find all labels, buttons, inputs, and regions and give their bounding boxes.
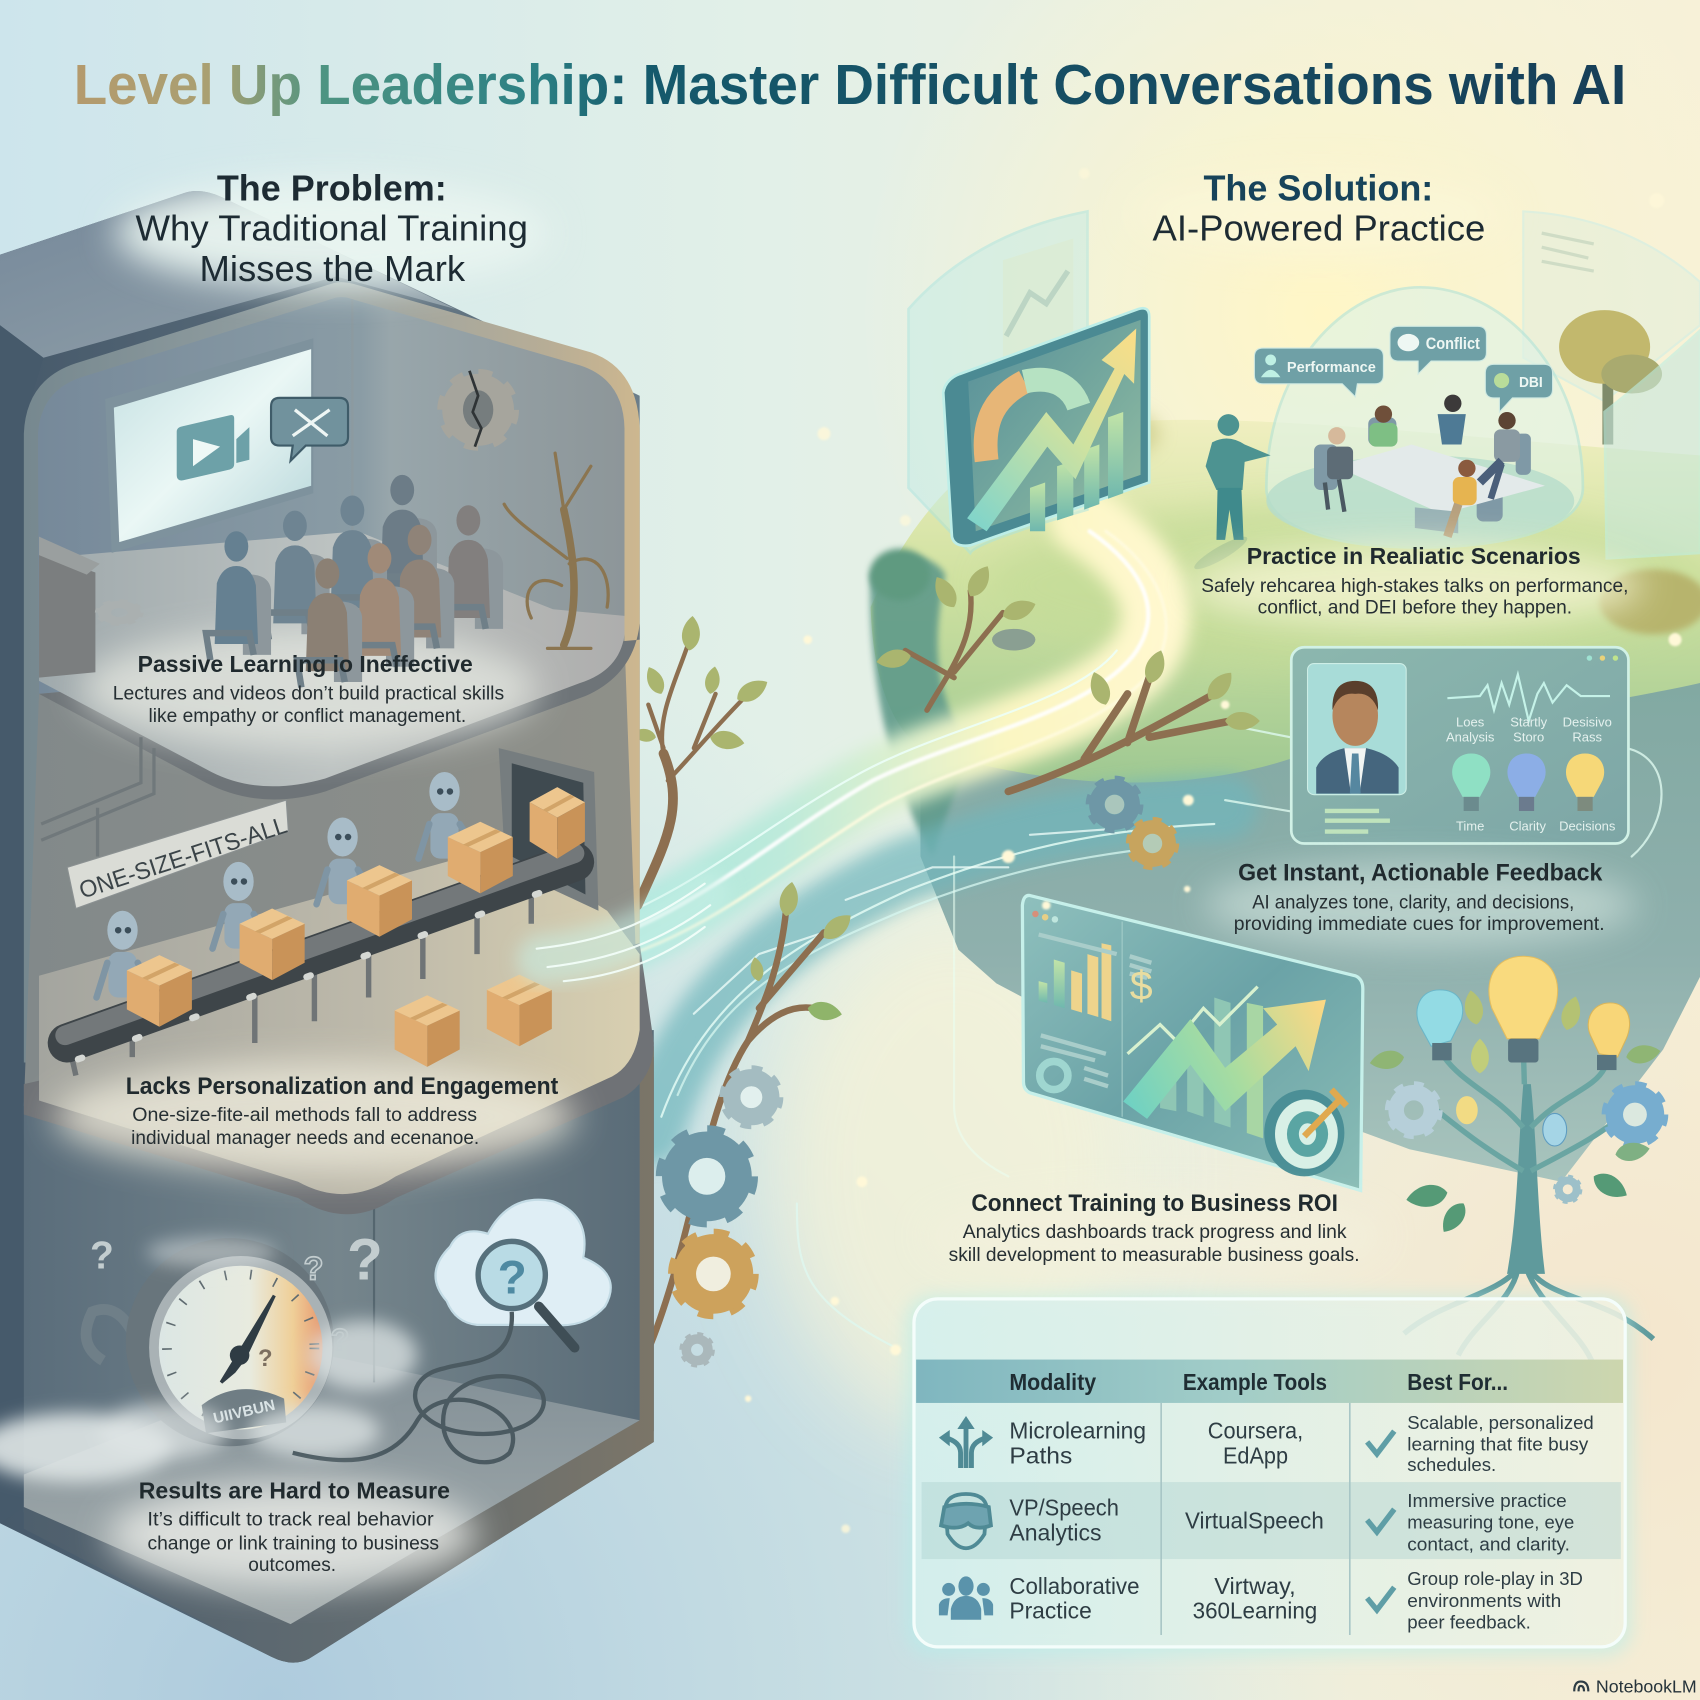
text: connect training: skill development to measurable business goals. [949,1244,1360,1266]
metric labels [1446,714,1616,833]
metric labels: Time [1456,818,1484,833]
target [1264,1090,1347,1176]
text: passive learning: Lectures and videos don’t build practical skills [113,682,504,704]
leaves on tree [1368,989,1662,1237]
sound wave [1447,674,1610,721]
row: collaborative: Group role-play in 3D [1407,1568,1583,1589]
glow behind text: feedback [1203,862,1637,949]
conveyor belt [65,853,575,1076]
heading: the problem: The Problem: [217,169,447,209]
text: connect training: Analytics dashboards track progress and link [963,1221,1347,1243]
metric labels: Rass [1572,730,1603,745]
icon: video camera [177,415,249,480]
icon: splitting arrows [939,1416,993,1468]
chart card with rising arrow [943,308,1149,546]
dashboard bars [1039,943,1111,1021]
bubble: Performance [1254,348,1383,397]
roi big arrow [1123,1000,1326,1119]
text: results hard to measure [139,1477,450,1576]
text: practice in realistic scenarios: Safely rehcarea high-stakes talks on performance, [1201,575,1628,597]
text: lacks personalization: One-size-fite-ail methods fall to address [132,1104,477,1126]
row: VR speech: VP/Speech [1009,1495,1119,1521]
text: lacks personalization [126,1073,558,1149]
text: results hard to measure: change or link training to business [147,1532,439,1554]
text: lacks personalization: individual manager needs and ecenanoe. [131,1127,479,1149]
question marks: ? [347,1227,383,1292]
question marks: ? [304,1250,323,1286]
floor of room 2 [24,846,654,1214]
row: microlearning: Scalable, personalized [1407,1412,1594,1433]
metric labels: Analysis [1446,730,1495,745]
sign: ONE-SIZE-FITS-ALL [76,812,290,904]
text: instant feedback [1234,859,1605,935]
question marks: ? [331,1324,349,1357]
heading: the solution: The Solution: [1203,169,1433,209]
table header: Modality [1009,1369,1096,1395]
row: VR speech: measuring tone, eye [1407,1512,1574,1533]
row: VR speech: Analytics [1009,1520,1102,1546]
donut chart [986,380,1079,461]
panel: comparison table [905,1296,1632,1656]
text: results hard to measure: Results are Hard to Measure [139,1477,450,1503]
metric labels: Startly [1510,714,1548,729]
row: VR speech: contact, and clarity. [1407,1533,1570,1554]
arrow [967,329,1136,531]
text: passive learning [113,651,504,727]
metric labels: Decisions [1559,818,1616,833]
robots with boxes [96,772,585,1027]
icon: people [939,1576,993,1620]
row: collaborative: Virtway, [1214,1573,1296,1599]
heading: the problem [136,169,528,289]
text: practice in realistic scenarios [1201,543,1628,619]
glass cylinder panels [909,211,1700,553]
stream passing over floor edge [537,884,710,981]
row: collaborative [939,1568,1583,1632]
row: microlearning: Paths [1009,1443,1072,1469]
question marks: ? [258,1345,273,1372]
text: results hard to measure: It’s difficult to track real behavior [147,1508,434,1530]
panel: room 2 one size fits all [24,737,710,1214]
row: collaborative: environments with [1407,1590,1561,1611]
flowing AI stream [542,520,1662,1350]
gauge: UIIVBUN [212,1397,277,1427]
heading: the problem: Why Traditional Training [136,209,528,249]
roots [1404,1268,1653,1366]
row: VR speech: VirtualSpeech [1185,1508,1324,1534]
icon: check [1367,1509,1394,1532]
gears, centre [664,781,1175,1365]
text: instant feedback: AI analyzes tone, clarity, and decisions, [1252,892,1574,914]
bubble: Performance: Performance [1287,359,1376,376]
glow behind text: roi [927,1195,1382,1277]
question marks: ? [90,1234,114,1277]
question marks [90,1227,383,1372]
text: passive learning: Passive Learning io Ineffective [138,651,473,677]
floor of room 1 [39,531,640,799]
left building: structure [0,191,654,1663]
ROI dashboard [1022,895,1363,1190]
pipes on wall [41,737,154,857]
bulbs on tree [1417,956,1630,1146]
background tree on hill [1559,310,1662,445]
metric labels: Clarity [1509,818,1547,833]
trunk and branches [1507,1084,1545,1274]
icon: speech bubble with X [271,398,348,461]
fog [0,1237,417,1482]
icon: VR headset [941,1494,991,1548]
icon: magnifying glass: ? [498,1251,527,1304]
row: VR speech [941,1490,1574,1554]
standing figure [1191,414,1271,574]
row: VR speech: Immersive practice [1407,1490,1567,1511]
boxes on the floor [395,975,552,1067]
text: connect training [949,1190,1360,1266]
icon: check [1367,1431,1394,1454]
feedback card [1291,647,1628,843]
gauge [86,1238,334,1446]
row: microlearning: learning that fite busy [1407,1434,1589,1455]
bubble: DBI: DBI [1519,374,1543,391]
row: microlearning: schedules. [1407,1454,1496,1475]
bulbs [1452,754,1604,811]
row: microlearning [939,1412,1594,1475]
icon: magnifying glass [478,1241,575,1348]
roi bars [1160,997,1263,1138]
text: connect training: Connect Training to Business ROI [971,1190,1338,1217]
people [1325,395,1520,537]
donut [1040,1061,1068,1090]
icon: cracked gear [444,371,512,447]
text: lacks personalization: Lacks Personalization and Engagement [126,1073,558,1100]
metric labels: Storo [1513,730,1544,745]
metric labels: Desisivo [1563,714,1612,729]
heading: the solution [1152,169,1485,249]
roi small arrow [1128,987,1258,1054]
row: collaborative: 360Learning [1193,1598,1317,1624]
dark doorway [499,748,598,911]
icon: small gear on floor [99,602,140,624]
row: microlearning: EdApp [1223,1443,1288,1469]
bubble: DBI [1485,364,1553,412]
text: instant feedback: Get Instant, Actionable Feedback [1238,859,1603,886]
row: collaborative: Collaborative [1009,1573,1139,1599]
tangled cable [293,1312,544,1462]
table row bands [922,1403,1621,1635]
dashboard text lines [1039,935,1151,1086]
table header: Best For... [1407,1369,1508,1395]
bubble: Conflict: Conflict [1426,335,1480,353]
title: Level Up Leadership: Master Difficult Conversations with AI [74,53,1626,116]
text: results hard to measure: outcomes. [248,1554,336,1576]
text: practice in realistic scenarios: conflict, and DEI before they happen. [1258,597,1572,619]
dollar sign: $ [1130,963,1153,1009]
projection screen [105,338,313,553]
heading: the solution: AI-Powered Practice [1152,209,1485,249]
bubble: Conflict [1390,326,1486,374]
row: collaborative: Practice [1009,1598,1092,1624]
row: collaborative: peer feedback. [1407,1611,1531,1632]
glow behind text: practice [1187,544,1643,627]
right glass panel [1605,331,1700,558]
meeting table [1336,445,1545,533]
row: microlearning: Coursera, [1208,1418,1303,1444]
bars [1030,412,1123,531]
dead tree [504,453,608,648]
glow behind text [108,1482,477,1586]
audience in chairs [206,475,503,687]
table header [916,1360,1623,1403]
row: microlearning: Microlearning [1009,1418,1146,1444]
text: passive learning: like empathy or conflict management. [149,705,466,727]
metric labels: Loes [1456,714,1485,729]
notebooklm badge: NotebookLM [1596,1676,1697,1696]
podium [39,537,100,678]
text: instant feedback: providing immediate cues for improvement. [1234,913,1605,935]
panel: room 3 results hard to measure [0,1200,611,1586]
panel: room 1 passive learning [39,338,640,799]
lightbulb tree [1368,956,1663,1366]
table header: Example Tools [1183,1369,1327,1395]
floating island: green landscape and underside [870,407,1700,1182]
tree branches with leaves, centre [631,562,1260,1344]
icon: check [1367,1587,1394,1610]
glow behind headings [115,173,1503,287]
sparkles [745,168,1682,1533]
heading: the problem: Misses the Mark [199,249,465,289]
text: practice in realistic scenarios: Practice in Realiatic Scenarios [1247,543,1581,569]
portrait [1308,664,1406,795]
glass dome with meeting [1254,287,1583,548]
gears on tree [1390,1086,1663,1202]
icon: cloud [436,1200,611,1325]
text lines under portrait [1325,811,1390,832]
chairs [1314,417,1531,521]
